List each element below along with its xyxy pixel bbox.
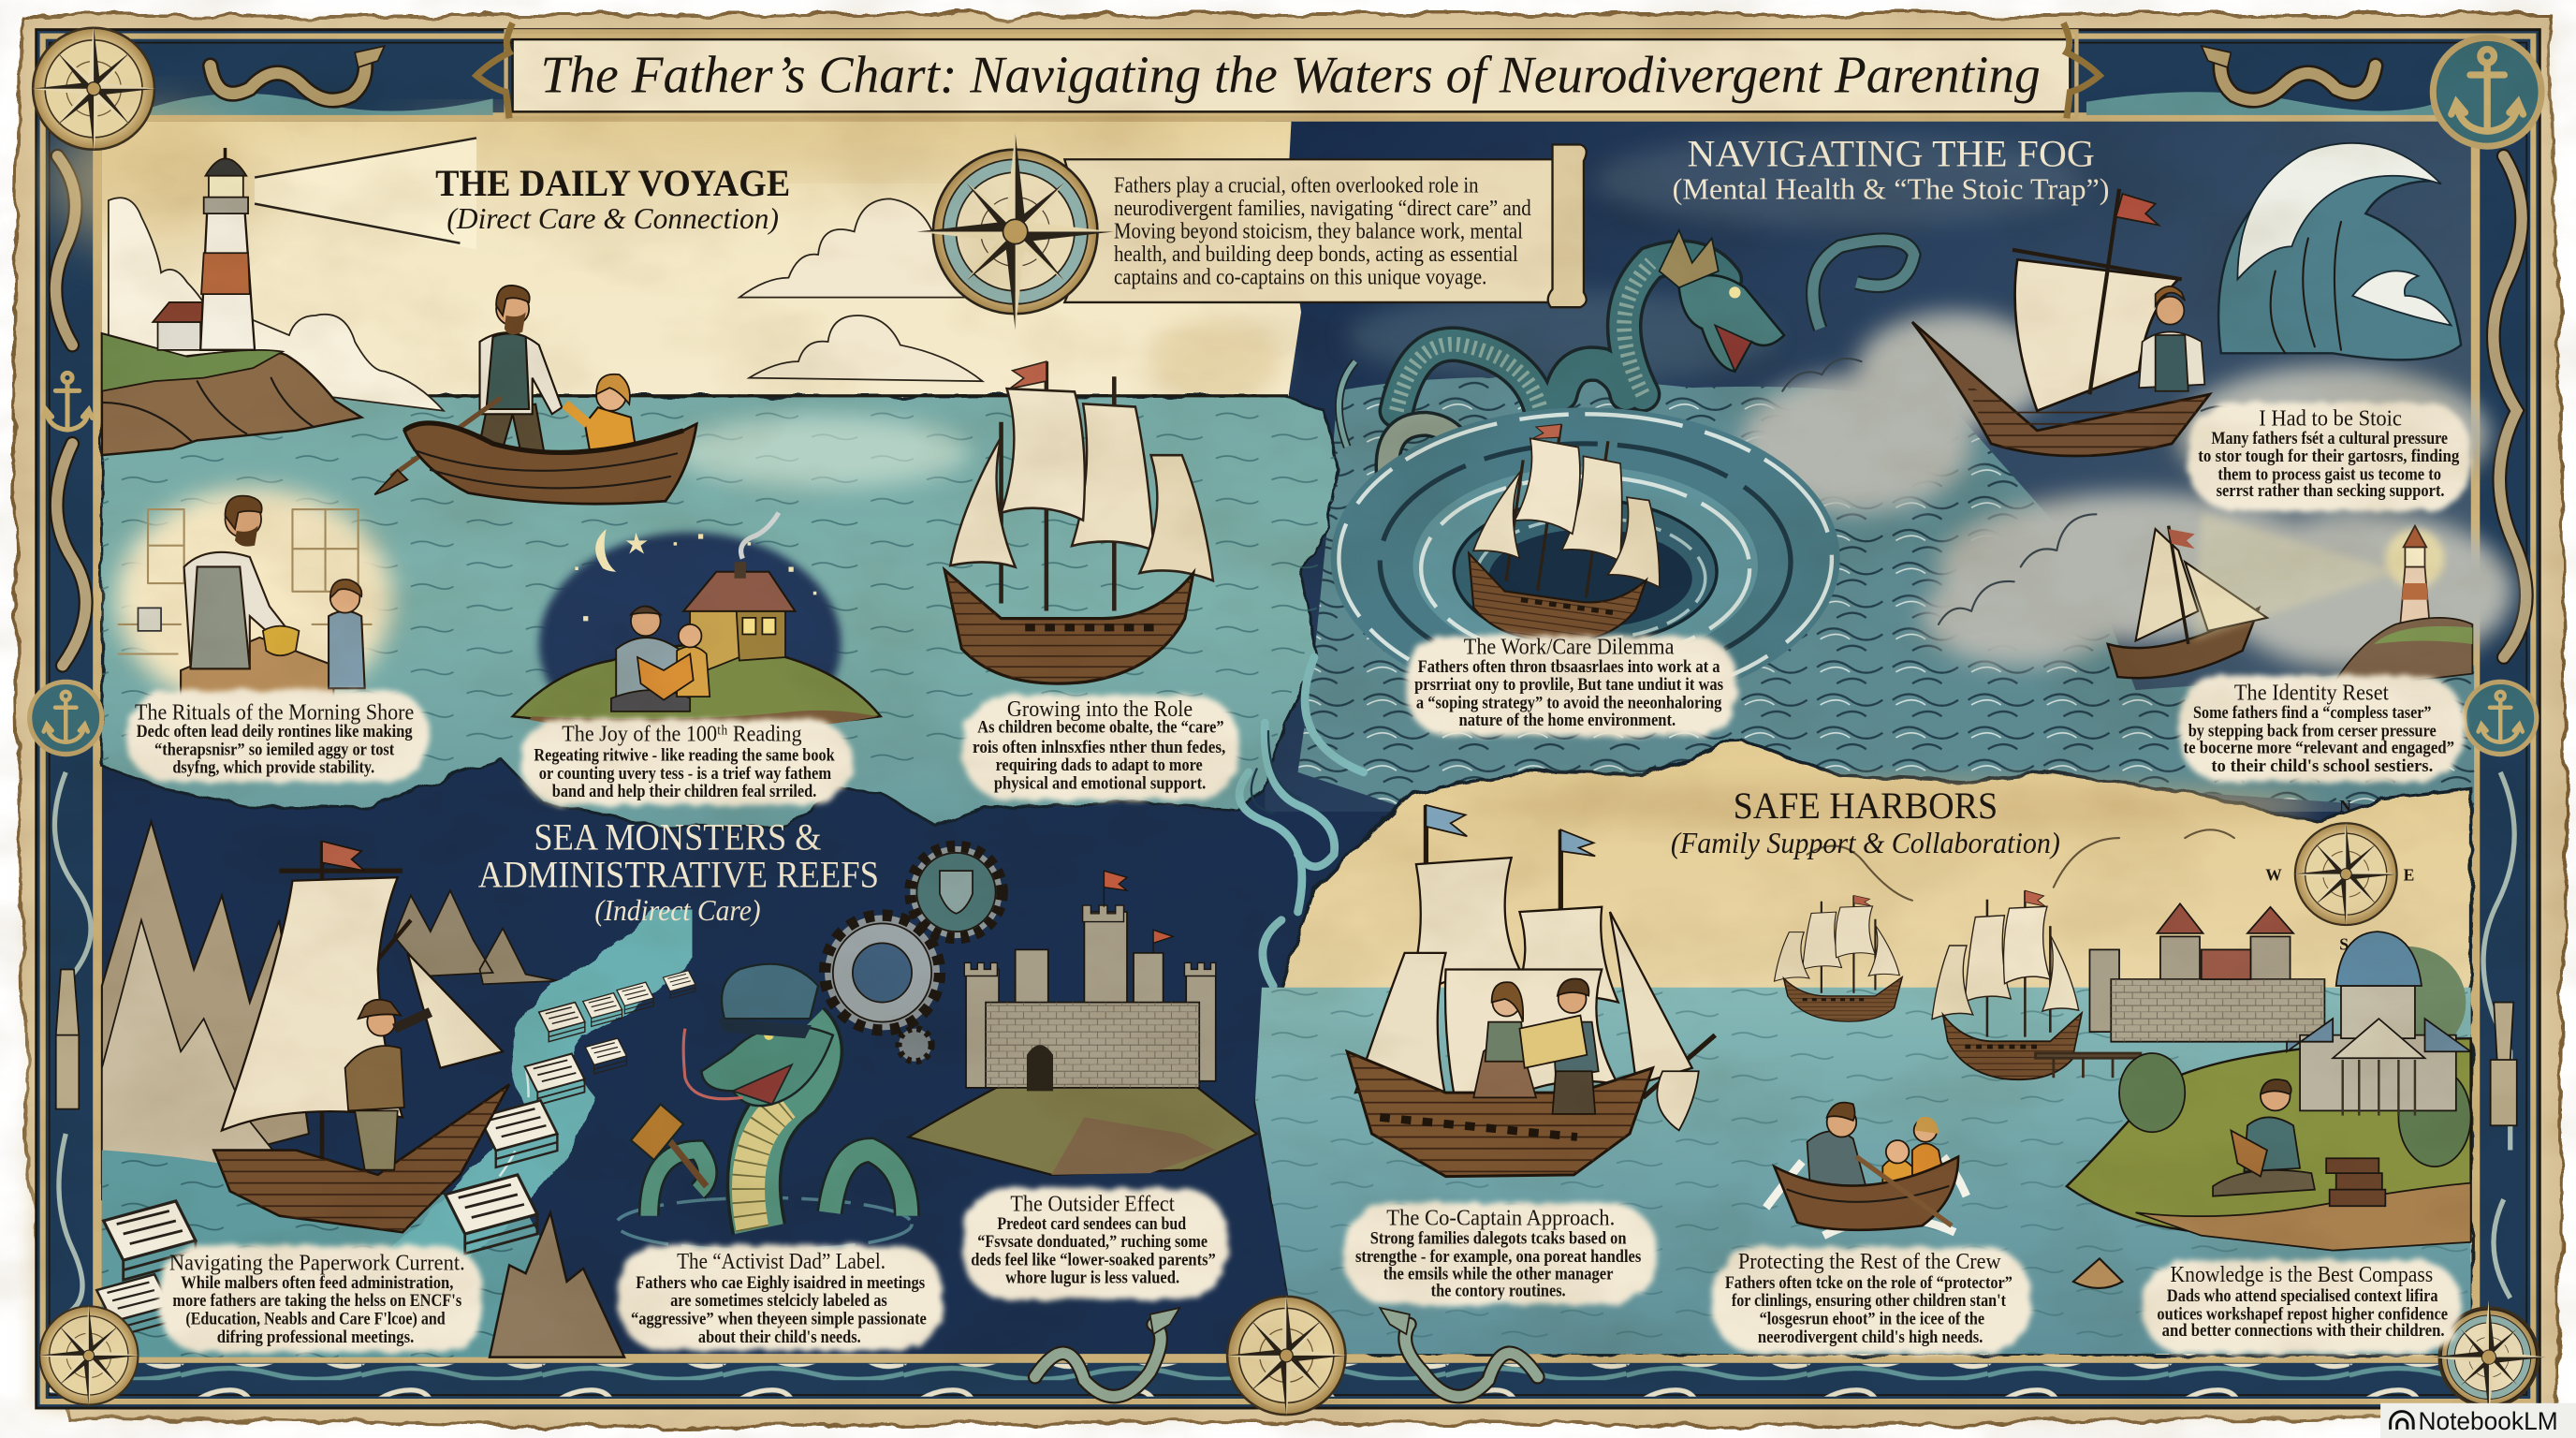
father cooking [184, 552, 292, 668]
callout: the work care dilemma: nature of the home environment. [1459, 711, 1676, 730]
callout: the identity reset: The Identity Reset [2234, 681, 2389, 706]
callout: joy of the 100th reading: band and help their children feal srriled. [552, 782, 816, 801]
callout: navigating the paperwork current: Navigating the Paperwork Current. [169, 1251, 465, 1276]
parchment sky [102, 122, 1301, 399]
callout: joy of the 100th reading [520, 720, 853, 805]
callout: protecting the rest of the crew: Protecting the Rest of the Crew [1738, 1249, 2001, 1274]
intro text [1114, 172, 1531, 290]
callout: joy of the 100th reading: or counting uvery tess - is a trief way fathem [539, 764, 831, 784]
corner compass bottom left [38, 1305, 139, 1406]
callout: the work care dilemma: The Work/Care Dilemma [1464, 635, 1675, 660]
corner anchor medallion top right [2433, 37, 2541, 146]
callout: growing into the role [963, 695, 1238, 800]
bottom dragon right [1380, 1308, 1538, 1397]
callout: the identity reset: te bocerne more “relevant and engaged” [2183, 739, 2454, 758]
icon: small sailboat [2108, 526, 2267, 678]
father [476, 404, 546, 460]
callout: the activist dad label: Fathers who cae Eighly isaidred in meetings [636, 1273, 926, 1293]
heading: the daily voyage: (Direct Care & Connection) [446, 202, 779, 235]
bottom dragon left [1035, 1308, 1179, 1397]
island [513, 644, 881, 727]
sailor [2157, 297, 2184, 325]
callout: rituals of the morning shore: dsyfng, which provide stability. [172, 758, 374, 778]
callout: the work care dilemma: a “soping strategy” to avoid the neeonhaloring [1416, 693, 1722, 712]
child helper [329, 611, 365, 688]
heading: safe harbors: SAFE HARBORS [1734, 785, 1998, 827]
callout: navigating the paperwork current: more fathers are taking the helss on ENCF's [172, 1291, 462, 1311]
intro text: health, and building deep bonds, acting as essential [1114, 242, 1518, 267]
border vine right lower [2483, 772, 2514, 1298]
gears and seals [825, 846, 1003, 1062]
spyglass right [2491, 1003, 2517, 1125]
callout: protecting the rest of the crew [1712, 1247, 2030, 1354]
castle on island [909, 871, 1257, 1175]
callout: i had to be stoic: to stor tough for their gartosrs, finding [2198, 447, 2460, 466]
intro text: Moving beyond stoicism, they balance work, mental [1114, 218, 1523, 243]
child [585, 407, 637, 460]
callout: the co-captain approach: The Co-Captain Approach. [1386, 1205, 1615, 1230]
stars [575, 533, 816, 621]
corner compass top left [32, 27, 155, 151]
daily sea [102, 396, 1338, 827]
gavel [664, 1134, 707, 1186]
callout: the co-captain approach: the contory routines. [1431, 1282, 1566, 1301]
panel: safe harbors background [1255, 740, 2471, 1354]
callout: the activist dad label: are sometimes stelcicly labeled as [670, 1291, 887, 1311]
panel: the daily voyage background [50, 115, 1338, 827]
tongue [683, 1029, 742, 1099]
callout: the activist dad label [618, 1245, 943, 1351]
heading: navigating the fog: (Mental Health & “The Stoic Trap”) [1673, 172, 2110, 205]
scroll roll [1548, 144, 1587, 307]
heading: sea monsters [478, 815, 879, 927]
icon: storm ship with sailor [1912, 189, 2210, 456]
icon: ship sinking in whirlpool [1458, 414, 1680, 656]
navigator [345, 1046, 404, 1110]
ripples [616, 1197, 912, 1251]
father and child in rowboat [374, 286, 696, 504]
reading child [677, 646, 710, 697]
oar [391, 398, 501, 477]
callout: protecting the rest of the crew: for clinlings, ensuring other children stan't [1732, 1291, 2006, 1311]
callout: the outsider effect: Predeot card sendees can bud [997, 1214, 1186, 1234]
callout: joy of the 100th reading: Regeating ritwive - like reading the same book [534, 746, 835, 766]
bowl [263, 626, 299, 655]
callout: protecting the rest of the crew: Fathers often tcke on the role of “protector” [1725, 1273, 2012, 1293]
spires bottom [490, 1212, 624, 1357]
title text: The Father’s Chart: Navigating the Waters of Neurodivergent Parenting [540, 46, 2041, 104]
border serpent right upper [2494, 156, 2526, 657]
notebooklm badge [2380, 1403, 2576, 1438]
heading: sea monsters: (Indirect Care) [594, 894, 761, 927]
heading: the daily voyage: THE DAILY VOYAGE [435, 162, 790, 204]
rowing father [1808, 1131, 1866, 1191]
ship with navigator and spyglass [213, 842, 509, 1232]
callout: the identity reset: by stepping back from cerser pressure [2188, 721, 2437, 741]
big harbor ship with co-captains [1347, 805, 1715, 1177]
tentacle [1339, 361, 1355, 447]
night island vignette [513, 513, 881, 756]
cottage [158, 322, 200, 350]
callout: knowledge is the best compass: and better connections with their children. [2162, 1321, 2445, 1341]
harbor compass with cardinal letters [2265, 797, 2414, 953]
callout: the identity reset [2178, 675, 2465, 782]
mountains [102, 822, 309, 1183]
bureaucrat serpent with gavel [616, 964, 912, 1251]
serpent head [1679, 275, 1784, 372]
callout: growing into the role: Growing into the Role [1007, 697, 1193, 722]
icon: distant lighthouse [2193, 513, 2472, 690]
storm sea [1298, 377, 2474, 822]
callout: the activist dad label: about their child's needs. [698, 1328, 861, 1347]
left anchor [42, 373, 93, 430]
intro text: Fathers play a crucial, often overlooked role in [1114, 172, 1479, 198]
harbor compass with cardinal letters: S [2339, 934, 2349, 953]
intro text: neurodivergent families, navigating “direct care” and [1114, 196, 1531, 221]
books [2326, 1158, 2385, 1206]
domed academy [2300, 1035, 2456, 1110]
distant ships [1774, 890, 2082, 1079]
reading dad [616, 638, 681, 705]
bottom center compass [1226, 1295, 1347, 1416]
harbor castle [2036, 903, 2324, 1078]
kettle [138, 608, 161, 631]
spyglass left [56, 969, 79, 1109]
heading: sea monsters: ADMINISTRATIVE REEFS [478, 854, 879, 896]
dragon top right [2202, 46, 2376, 100]
serpent crest [1660, 230, 1719, 287]
callout: i had to be stoic: I Had to be Stoic [2259, 406, 2402, 432]
lighthouse on cliff [102, 148, 361, 455]
callout: the work care dilemma: Fathers often thron tbsaasrlaes into work at a [1418, 657, 1720, 677]
callout: navigating the paperwork current [159, 1245, 483, 1352]
title plaque [476, 23, 2100, 118]
callout: navigating the paperwork current: (Education, Neabls and Care F'lcoe) and [185, 1310, 446, 1329]
illustration: whirlpool [1331, 407, 1840, 710]
callout: growing into the role: As children become obalte, the “care” [977, 718, 1224, 738]
callout: the work care dilemma: prsrriıat ony to provlile, But tane undiut it was [1414, 675, 1723, 695]
medallion anchor left [30, 682, 102, 755]
heading: safe harbors [1671, 785, 2060, 859]
harbor sea [1255, 988, 2471, 1354]
kitchen vignette [117, 488, 393, 712]
head [701, 1026, 833, 1106]
arched coil [1388, 424, 1471, 477]
fin [1383, 501, 1406, 583]
callout: the outsider effect: deds feel like “lower-soaked parents” [971, 1250, 1216, 1269]
bracket left [476, 23, 513, 118]
callout: the outsider effect [963, 1188, 1227, 1299]
panel: navigating the fog background [1265, 122, 2513, 822]
heading: navigating the fog [1673, 132, 2110, 205]
corner compass bottom right [2432, 1300, 2546, 1415]
rowboat with father and children [1766, 1103, 1967, 1236]
callout: growing into the role: physical and emotional support. [994, 773, 1206, 793]
reading father [2244, 1117, 2300, 1171]
heading: navigating the fog: NAVIGATING THE FOG [1687, 132, 2095, 174]
island with academy and reading father [2067, 932, 2471, 1251]
harbor compass with cardinal letters: N [2339, 797, 2351, 815]
callout: the outsider effect: “Fsvsate donduated,” ruching some [977, 1232, 1208, 1252]
chart [1519, 1016, 1587, 1068]
paper current [378, 929, 677, 1298]
callout: the identity reset: to their child's school sestiers. [2211, 756, 2433, 776]
tower [200, 212, 255, 350]
callout: i had to be stoic: Many fathers fsét a cultural pressure [2211, 429, 2448, 448]
smoke [741, 513, 779, 559]
panel base: deep navy water [102, 122, 2471, 1354]
medallion anchor right [2465, 682, 2537, 755]
callout: protecting the rest of the crew: neerodivergent child's high needs. [1758, 1328, 1983, 1347]
bracket right [2063, 23, 2100, 118]
callout: the activist dad label: “aggressive” when theyeen simple passionate [631, 1310, 927, 1329]
captain hat [722, 964, 818, 1019]
icon: sea serpent in fog [1339, 230, 1914, 583]
intro text: captains and co-captains on this unique voyage. [1114, 265, 1486, 290]
left arm [649, 1151, 708, 1216]
callout: joy of the 100th reading: The Joy of the 100ᵗʰ Reading [562, 722, 802, 747]
heading: safe harbors: (Family Support & Collaboration) [1671, 827, 2060, 859]
callout: protecting the rest of the crew: “losgesrun ehoot” in the icee of the [1760, 1310, 1984, 1329]
callout: the co-captain approach: the emsils while the other manager [1383, 1264, 1614, 1284]
callout: knowledge is the best compass: Dads who attend specialised context lifira [2167, 1286, 2438, 1306]
icon: big breaking wave [2218, 143, 2461, 360]
border vine left lower [54, 772, 91, 1314]
counter [181, 638, 333, 710]
night dome [539, 533, 842, 756]
callout: growing into the role: rois often inlnsxfies nther thun fedes, [973, 738, 1225, 757]
scroll paper [1064, 159, 1553, 302]
heading: sea monsters: SEA MONSTERS & [534, 815, 822, 858]
callout: growing into the role: requiring dads to adapt to more [996, 756, 1203, 775]
clouds [109, 198, 996, 411]
right coil [829, 1151, 907, 1216]
callout: knowledge is the best compass: Knowledge is the Best Compass [2170, 1262, 2433, 1287]
callout: navigating the paperwork current: While malbers often feed administration, [181, 1273, 454, 1293]
moon [595, 529, 616, 572]
callout: rituals of the morning shore: Dedc often lead deily rontines like making [137, 722, 413, 741]
callout: i had to be stoic: serrst rather than secking support. [2217, 481, 2445, 501]
intro scroll with compass [916, 133, 1587, 330]
harbor compass with cardinal letters: W [2265, 866, 2282, 885]
callout: navigating the paperwork current: difring professional meetings. [217, 1328, 414, 1347]
open book [637, 654, 694, 700]
notebooklm badge: NotebookLM [2418, 1406, 2558, 1435]
co-captain mother [1473, 1043, 1536, 1097]
cottage [690, 581, 739, 677]
trees [2119, 1053, 2185, 1132]
callout: rituals of the morning shore: “therapsnisr” so iemiled aggy or tost [154, 740, 395, 759]
swirling current [1239, 657, 1364, 986]
callout: the co-captain approach: strengthe - for example, ona poreat handles [1355, 1247, 1642, 1267]
callout: i had to be stoic [2188, 403, 2471, 511]
callout: the outsider effect: whore lugur is less valued. [1005, 1269, 1179, 1288]
top band sea right [2086, 92, 2448, 115]
boat [404, 423, 696, 504]
callout: the co-captain approach [1344, 1203, 1656, 1304]
border serpent left upper [56, 156, 86, 666]
callout: the identity reset: Some fathers find a “compless taser” [2193, 703, 2431, 723]
callout: knowledge is the best compass [2143, 1260, 2461, 1354]
neck [754, 1027, 815, 1229]
small rock [2073, 1258, 2123, 1288]
lighthouse beam [255, 138, 476, 250]
serpent tail [1813, 240, 1914, 329]
cliff [102, 333, 361, 455]
icon: stacks of paperwork [96, 971, 695, 1338]
harbor compass with cardinal letters: E [2404, 866, 2414, 885]
compass rose [916, 133, 1114, 330]
callout: the work care dilemma [1406, 635, 1736, 736]
co-captain father [1553, 1022, 1599, 1078]
lower left water [102, 1151, 555, 1357]
callout: the outsider effect: The Outsider Effect [1010, 1191, 1175, 1216]
kids [1882, 1158, 1919, 1196]
callout: rituals of the morning shore [126, 690, 429, 782]
dragon top left [211, 46, 385, 100]
storm clouds [1741, 312, 2513, 670]
heading: the daily voyage [435, 162, 790, 235]
callout: the co-captain approach: Strong families dalegots tcaks based on [1370, 1229, 1627, 1249]
callout: rituals of the morning shore: The Rituals of the Morning Shore [135, 700, 414, 726]
callout: knowledge is the best compass: outices workshapef repost higher confidence [2157, 1304, 2448, 1324]
callout: i had to be stoic: them to process gaist us tecome to [2217, 464, 2441, 484]
big sailing ship [944, 361, 1213, 683]
callout: the activist dad label: The “Activist Dad” Label. [677, 1249, 886, 1274]
panel: sea monsters water and terrain [102, 822, 677, 1357]
top band sea left [148, 94, 493, 115]
